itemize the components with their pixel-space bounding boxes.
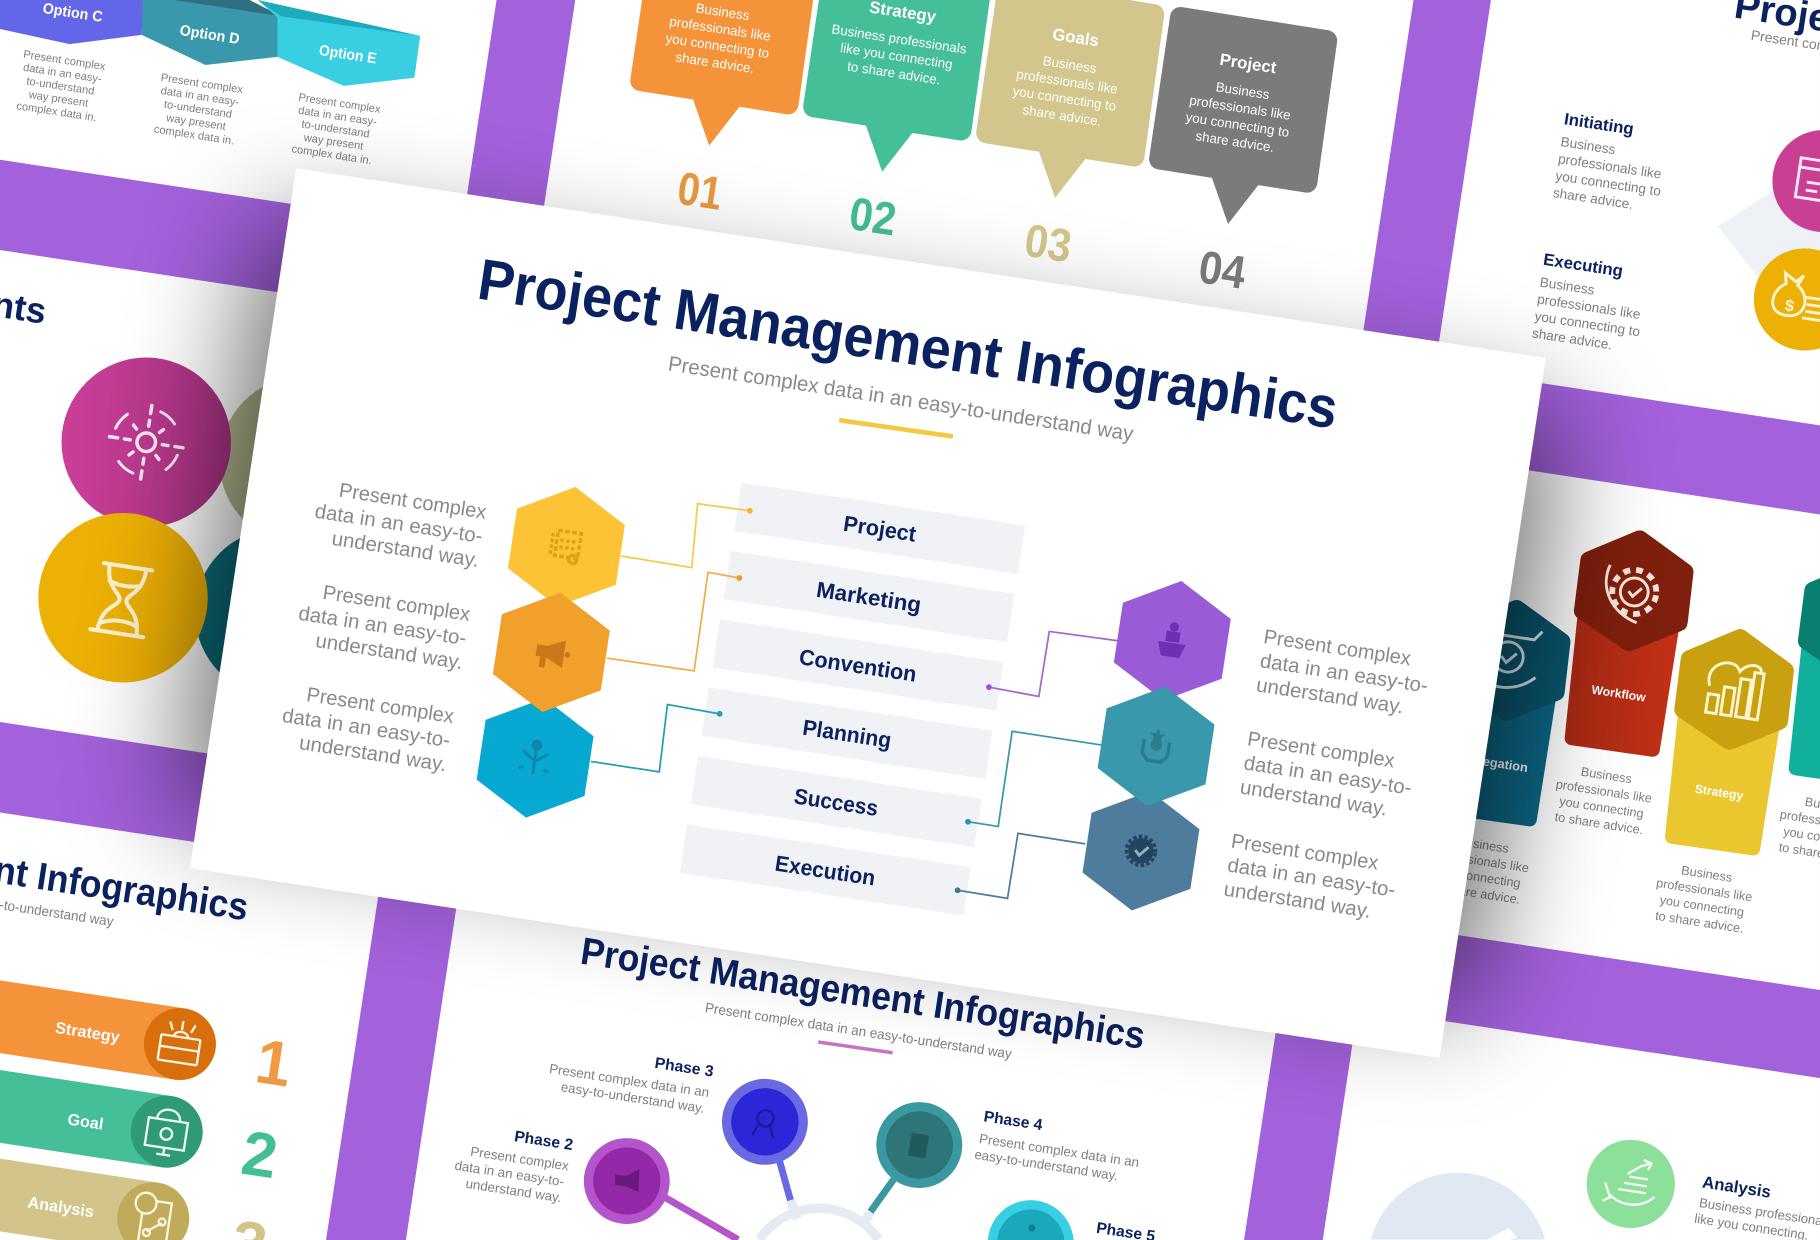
text: option C description: to-understand [26,75,95,98]
bubble: khaki Goals: you connecting to [1012,83,1117,114]
card: Workflow: professionals like [1555,777,1653,806]
bubble: gray Project: share advice. [1195,128,1275,155]
ribbon: Option C [0,0,144,44]
text: phase 4: Present complex data in an [978,1131,1140,1170]
text: left label 3: data in an easy-to- [281,705,452,752]
card: Strategy [1650,638,1785,937]
text: option D description: Present complex [160,72,244,96]
row: Success [691,756,982,847]
row: Marketing: Marketing [815,577,923,617]
panel: bottom-center slide with phases [406,891,1278,1240]
bubble: orange: you connecting to [665,31,770,61]
ribbon: Option C: Option C [42,0,104,26]
text: phase 3: Present complex data in an [548,1061,710,1100]
text: option C description: complex data in. [16,100,97,124]
panel: top-right slide [1435,0,1820,425]
text: phase 2: Phase 2 [513,1128,574,1154]
card: Workflow: Business [1580,765,1633,786]
phase 3 marker [722,1079,808,1200]
card: Delegation [1427,609,1561,907]
bubble: green Strategy [814,0,981,172]
panel: middle-right slide with hexagon cards [1427,466,1820,990]
row: Convention [713,619,1003,710]
text: Initiating: share advice. [1552,185,1634,212]
text: phase 2: understand way. [465,1176,563,1205]
text: Initiating [1552,109,1671,216]
number 2: 2 [237,1118,282,1192]
connector: teal to Success [965,731,1103,826]
hexagon: teal with winner icon [1093,678,1219,814]
text: right label 2: Present complex [1246,728,1396,772]
pill: Goal: Goal [66,1111,105,1134]
text: left label 1: Present complex [338,480,488,524]
text: option E description [290,92,382,167]
bubble: orange: professionals like [668,14,772,44]
bubble: khaki Goals: Goals [1051,25,1100,50]
text: option E description: Present complex [298,92,382,116]
text: phase 4 [973,1108,1144,1186]
text: option C description: Present complex [22,49,107,73]
connector: blue to Planning [591,705,723,772]
text: option E description: way present [302,132,365,153]
accent line [818,1042,893,1053]
number 1: 1 [251,1026,296,1101]
text: phase 2 [451,1120,574,1206]
panel: top-center slide with speech bubbles [540,0,1414,359]
circle: yellow with money icon: $ [1784,297,1795,316]
row: Execution [680,824,971,916]
connector: orange to Marketing [607,572,742,671]
text: option D description: way present [164,112,227,133]
text: left label 2: understand way. [314,630,464,674]
bubble: orange: share advice. [675,49,755,76]
text: left label 1 [310,477,488,572]
circle: magenta with document icon [1772,130,1820,232]
text: option C description: data in an easy- [22,62,103,86]
phase 2 marker [584,1138,738,1240]
bubble: gray Project: Business [1215,79,1271,102]
large pale circle [1371,1173,1545,1240]
connector: purple to Convention [986,631,1118,696]
phase 4 marker [871,1102,962,1212]
text: phase 4: easy-to-understand way. [973,1147,1119,1183]
text: Executing: you connecting to [1534,309,1641,339]
accent line [839,420,953,436]
number 01: 01 [674,162,726,220]
bubble: khaki Goals [987,0,1154,198]
text: option D description [152,72,244,148]
number 03: 03 [1021,214,1075,272]
text: phase 3: Phase 3 [654,1055,715,1081]
bubble: green Strategy: to share advice. [846,59,942,88]
row: Marketing [724,551,1014,642]
row: Convention: Convention [798,644,918,687]
card: Strategy: to share advice. [1654,909,1745,936]
text: Executing [1531,250,1650,356]
row: Success: Success [792,783,880,821]
card: Strategy: Strategy [1694,782,1744,803]
circle: magenta with sun icon [62,357,231,527]
text: right label 3: data in an easy-to- [1226,855,1397,902]
row: Planning [702,688,992,779]
text: right label 2 [1239,728,1417,824]
bubble: khaki Goals: share advice. [1022,102,1102,129]
text: right label 3 [1222,831,1400,926]
card: green [1774,570,1820,868]
text: option E description: to-understand [301,118,370,141]
text: right label 1: data in an easy-to- [1258,650,1429,698]
pill: Analysis: Analysis [26,1194,95,1221]
bubble: green Strategy: like you connecting [839,40,954,72]
circle: green with chart icon [1587,1140,1675,1228]
phase 5 marker [988,1200,1074,1240]
text: Initiating: Business [1560,134,1617,157]
circle: khaki [219,376,389,546]
row: Execution: Execution [773,851,877,891]
bubble: gray Project: you connecting to [1185,109,1290,140]
text: phase 2: data in an easy-to- [454,1158,565,1189]
text: Initiating: you connecting to [1555,168,1662,199]
number 04: 04 [1195,241,1249,299]
hexagon: orange with megaphone icon [488,584,614,720]
text: option C description: way present [27,89,90,110]
bubble: orange [641,0,808,146]
connector: yellow to Project [621,504,753,568]
hexagon: blue with tree icon [472,690,598,826]
text: right label 2: data in an easy-to- [1242,752,1413,800]
pill: Strategy: Strategy [54,1019,121,1047]
text: Analysis: Analysis [1701,1173,1772,1202]
card: Delegation: to share advice. [1431,880,1521,907]
row: Project: Project [842,511,918,547]
text: left label 2: Present complex [321,582,471,626]
text: Initiating: professionals like [1557,151,1662,182]
text: right label 1: Present complex [1262,626,1412,670]
text: Executing: Executing [1542,250,1624,281]
bubble: orange: Business [695,0,751,23]
text: left label 1: data in an easy-to- [313,501,484,548]
bubble: gray Project: Project [1218,50,1278,77]
hub ring [759,1200,879,1240]
central slide shadow [177,219,1558,1009]
text: left label 2: data in an easy-to- [297,603,468,650]
row: Project [734,483,1025,574]
card: Strategy: Business [1680,863,1733,885]
hexagon: slate with badge icon [1078,783,1204,919]
text: option D description: data in an easy- [160,85,240,109]
pill: Analysis [0,1137,194,1240]
panel: bottom-left slide with pills [0,801,382,1240]
text: Executing: share advice. [1531,326,1613,352]
text: Initiating: Initiating [1563,109,1635,139]
number 02: 02 [846,187,900,246]
hexagon: purple with podium icon [1109,573,1235,709]
diamond backdrop [1718,192,1820,290]
card: Strategy: you connecting [1659,893,1745,920]
ribbon: Option E: Option E [318,42,378,68]
card: Delegation: professionals like [1432,847,1530,875]
connector: slate to Execution [955,833,1085,898]
bubble: green Strategy: Business professionals [831,21,968,57]
text: right label 1: understand way. [1255,674,1405,718]
card: Workflow: you connecting [1558,794,1645,821]
text: left label 1: understand way. [330,528,480,572]
text: option E description: data in an easy- [297,105,378,129]
text: left label 3: Present complex [305,684,455,728]
card: Workflow: Workflow [1591,683,1647,705]
text: phase 4: Phase 4 [983,1108,1044,1134]
ribbon: Option D: Option D [178,22,241,48]
text: Executing: professionals like [1536,292,1641,322]
text: Analysis [1693,1172,1820,1240]
text: left label 3: understand way. [298,732,448,776]
hexagon: yellow with document icon [503,479,629,615]
text: left label 3 [277,681,455,776]
text: phase 3 [546,1039,715,1116]
text: left label 2 [293,579,471,674]
card: Strategy: professionals like [1655,876,1753,904]
bubble: gray Project [1160,17,1327,224]
pill: Strategy [0,963,221,1085]
text: phase 2: Present complex [469,1144,570,1174]
card: Delegation: Delegation [1462,750,1529,775]
card: Delegation: Business [1457,834,1510,856]
text: Executing: Business [1539,275,1596,298]
bubble: khaki Goals: professionals like [1015,67,1119,97]
text: option D description: complex data in. [153,123,235,148]
panel: bottom-right slide [1323,1008,1820,1240]
card: Workflow: to share advice. [1554,810,1644,837]
text: option C description [15,49,107,124]
circle: yellow with hourglass icon [38,513,208,682]
panel: central slide [190,168,1546,1058]
card: Workflow [1550,540,1684,838]
panel: top-left slide with option ribbons [0,0,497,230]
subtitle: Present complex data in an easy-to-understand way [704,999,1013,1062]
text: phase 3: easy-to-understand way. [560,1079,705,1116]
text: option E description: complex data in. [291,143,373,167]
text: right label 2: understand way. [1239,777,1389,821]
text: right label 1 [1255,626,1433,722]
bubble: gray Project: professionals like [1188,93,1292,123]
pill: Goal [0,1051,208,1173]
row: Planning: Planning [801,715,893,753]
text: option D description: to-understand [163,99,233,121]
circle: yellow with money icon [1754,248,1820,351]
text: right label 3: understand way. [1222,879,1372,923]
circle: teal [195,528,364,698]
heading: slide title: Project Management Infographics [578,930,1148,1058]
subtitle: Present complex data in an easy-to-understand way [667,352,1135,446]
panel: middle-left slide with circles [0,250,422,775]
ribbon: Option E [258,0,420,86]
ribbon: Option D [142,0,281,65]
title: Project Management Infographics [474,247,1342,441]
card: Delegation: you connecting [1435,864,1522,891]
bubble: khaki Goals: Business [1042,53,1098,76]
text: right label 3: Present complex [1230,831,1380,875]
